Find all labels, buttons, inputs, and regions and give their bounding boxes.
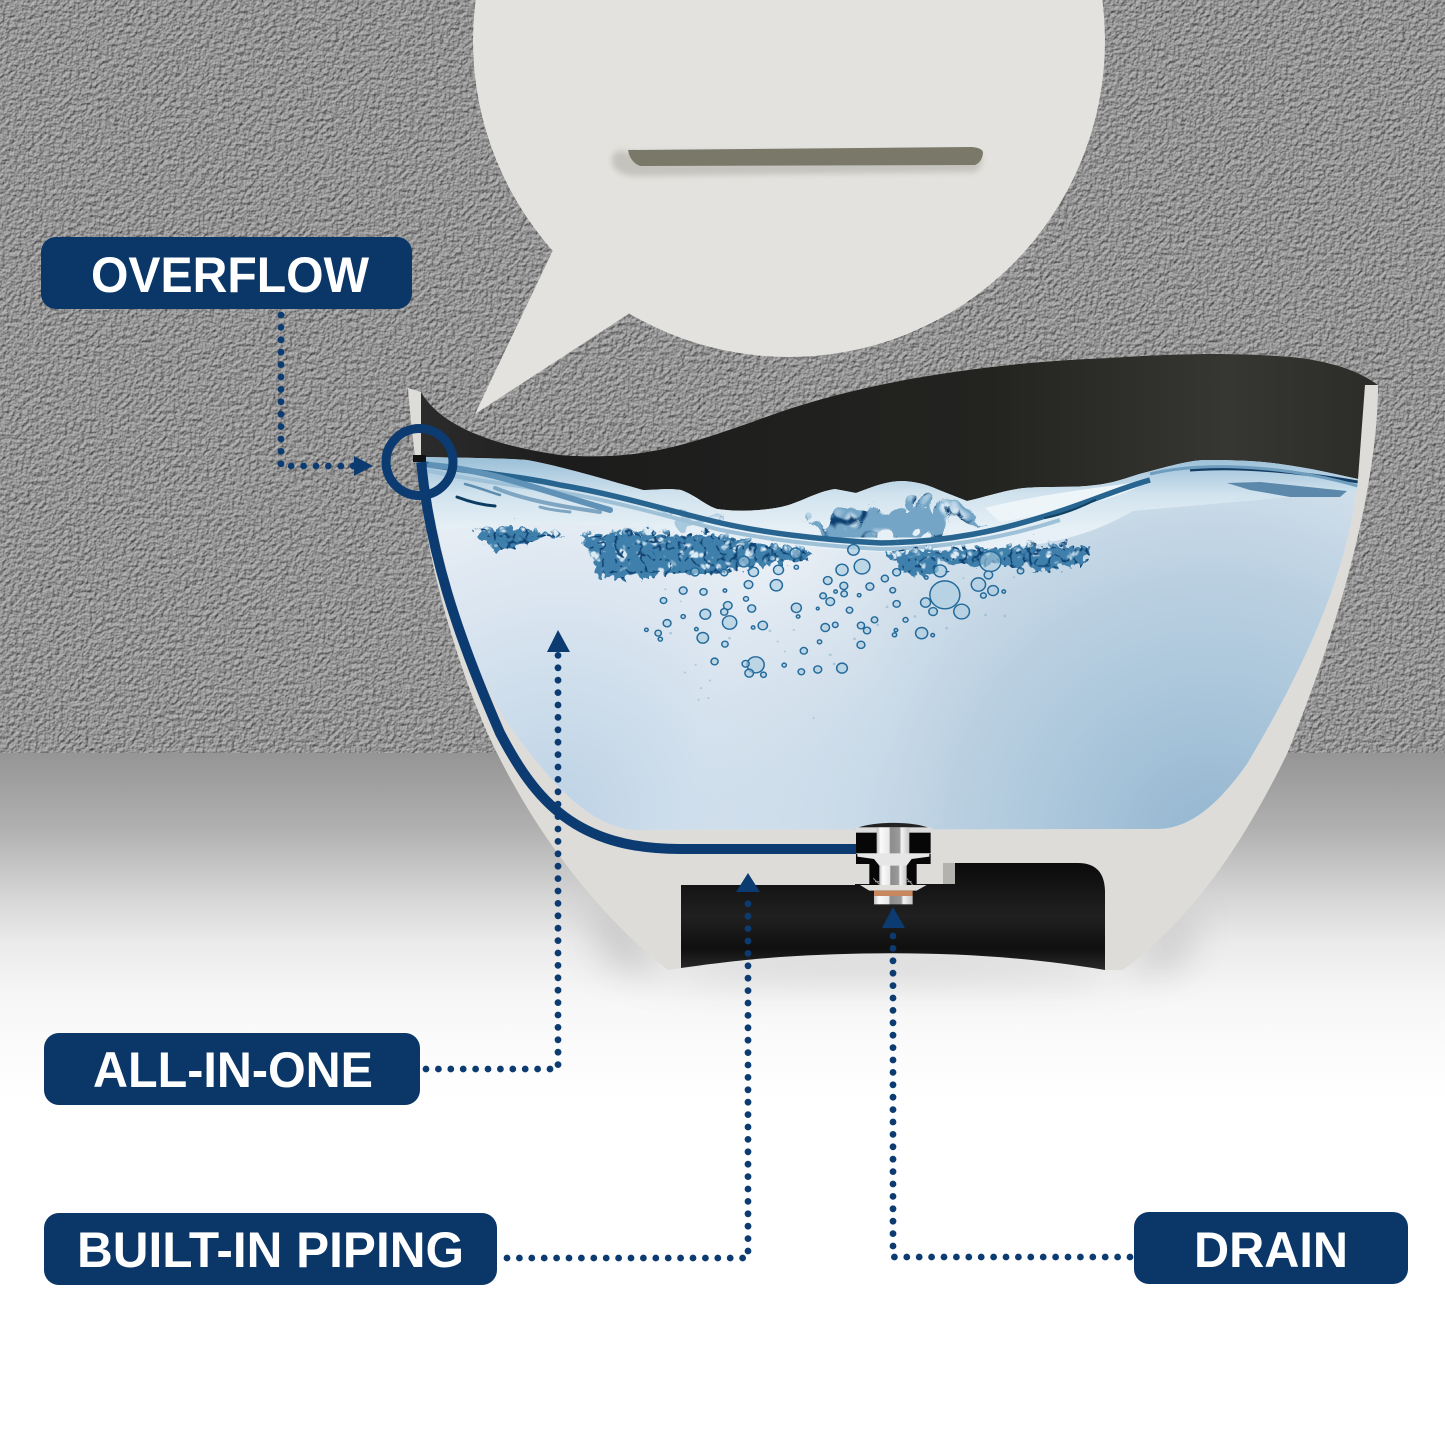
fine bubbles	[664, 576, 1015, 719]
surface highlights	[985, 483, 1139, 522]
label: all-in-one	[44, 1033, 420, 1105]
bathtub shell	[408, 354, 1378, 970]
label: all-in-one: ALL-IN-ONE	[93, 1042, 373, 1098]
overflow cut notch	[413, 455, 426, 462]
built-in piping	[421, 462, 856, 849]
overflow close-up bubble	[473, 0, 1105, 414]
textured wall background	[0, 0, 1445, 756]
bubbles	[645, 545, 1024, 677]
arrow: built-in piping to pipe	[507, 873, 760, 1258]
label: drain	[1134, 1212, 1408, 1284]
label: drain: DRAIN	[1194, 1222, 1348, 1278]
foam crests behind surface	[650, 488, 973, 531]
surface wave band	[420, 450, 1360, 552]
overflow target ring	[386, 428, 453, 496]
arrow: all-in-one to water	[426, 630, 570, 1069]
label: built-in piping	[44, 1213, 497, 1285]
main surface line	[425, 464, 1150, 543]
drain assembly	[854, 823, 932, 906]
opening under tub	[681, 863, 1105, 970]
surface streaks	[430, 465, 1095, 518]
tub contact shadows on floor	[590, 890, 1195, 980]
arrow: overflow to ring	[281, 315, 373, 476]
floor gradient	[0, 753, 1445, 1445]
bathtub dark interior	[421, 354, 1378, 515]
label: built-in piping: BUILT-IN PIPING	[77, 1222, 464, 1278]
underwater foam clusters	[472, 522, 1086, 575]
wall notch next to drain	[943, 863, 955, 884]
overflow slot	[612, 147, 983, 176]
label: overflow	[41, 237, 412, 309]
arrow: drain to fitting	[882, 907, 1130, 1257]
right surface patch	[1227, 482, 1347, 497]
water body	[426, 457, 1358, 830]
label: overflow: OVERFLOW	[91, 247, 370, 303]
